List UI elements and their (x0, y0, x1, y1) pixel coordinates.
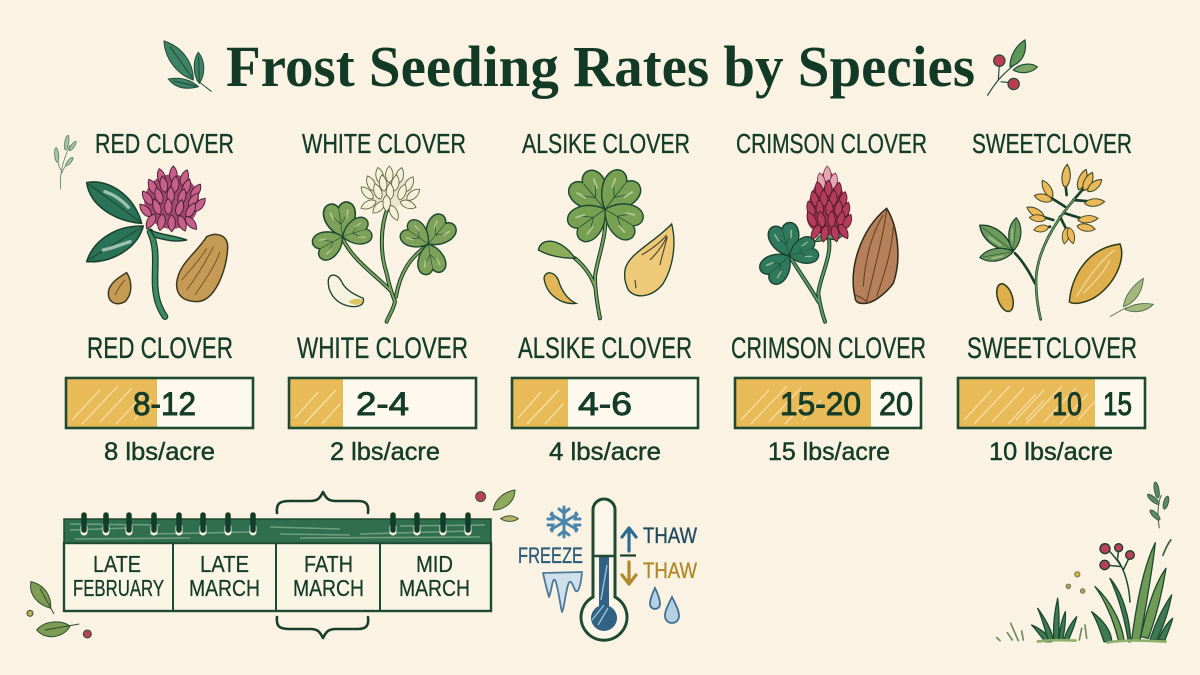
label: freeze: FREEZE (518, 543, 583, 568)
icon: icicles (543, 572, 582, 612)
label: late march (189, 551, 260, 601)
calendar header band (64, 519, 491, 543)
bar: alsike clover rate: 4-6 (578, 386, 632, 422)
icon: title right sprig (987, 40, 1037, 96)
label: crimson clover: CRIMSON CLOVER (731, 332, 926, 365)
calendar rings (84, 515, 468, 532)
calendar: seeding window (64, 492, 491, 638)
bar: white clover rate (289, 378, 476, 428)
icon: calendar upper-right leaves (476, 490, 518, 521)
label: red clover: RED CLOVER (87, 332, 233, 365)
bar: crimson clover rate: 15-20 (780, 386, 861, 422)
icon: corner grass and berries (997, 482, 1173, 643)
icon: water drops (650, 588, 679, 623)
heading: sweetclover: SWEETCLOVER (972, 128, 1132, 159)
bar: white clover rate: 2-4 (356, 386, 409, 422)
heading: crimson clover: CRIMSON CLOVER (736, 128, 927, 159)
panel: red clover (66, 128, 253, 466)
rate: alsike clover: 4 lbs/acre (549, 438, 661, 466)
brace above (277, 492, 368, 513)
label: mid march: MID (416, 551, 453, 577)
label: alsike clover: ALSIKE CLOVER (518, 332, 692, 365)
rate: white clover: 2 lbs/acre (330, 438, 440, 466)
bar: red clover rate: 8-12 (133, 386, 196, 422)
bar: sweetclover rate (958, 378, 1145, 428)
label: late february (73, 551, 164, 601)
bar: crimson clover rate (735, 378, 921, 428)
icon: arrow up (622, 528, 636, 551)
icon: white clover plant and seed (310, 166, 460, 322)
bar: alsike clover rate (512, 378, 698, 428)
icon: calendar lower-left leaves (27, 582, 91, 638)
heading: alsike clover: ALSIKE CLOVER (522, 128, 690, 159)
icon: arrow down (622, 562, 636, 584)
rate: red clover: 8 lbs/acre (104, 438, 215, 466)
bar: crimson clover rate: 20 (879, 386, 913, 422)
icon: thermometer (581, 499, 627, 640)
icon: crimson clover plant and seed (756, 166, 898, 322)
bar: sweetclover rate: 10 (1052, 386, 1082, 422)
label: late february: FEBRUARY (73, 575, 164, 601)
panel: white clover (289, 128, 476, 466)
heading: white clover: WHITE CLOVER (302, 128, 466, 159)
bar: sweetclover rate: 15 (1103, 386, 1132, 422)
icon: small sprig near red clover (54, 135, 77, 189)
calendar grid (64, 543, 491, 611)
label: late march: LATE (200, 551, 249, 577)
panel: freeze and thaw thermometer (518, 499, 697, 640)
label: mid march: MARCH (399, 575, 470, 601)
icon: title left sprig (164, 41, 212, 92)
heading: red clover: RED CLOVER (95, 128, 234, 159)
label: fath march: FATH (304, 551, 353, 577)
icon: snowflake (548, 507, 580, 537)
bar: red clover rate (66, 378, 253, 428)
icon: alsike clover plant and seeds (538, 166, 674, 318)
icon: red clover plant and seeds (87, 166, 228, 317)
label: white clover: WHITE CLOVER (297, 332, 468, 365)
title: Frost Seeding Rates by Species (226, 34, 975, 99)
label: sweetclover: SWEETCLOVER (967, 332, 1137, 365)
label: mid march (399, 551, 470, 601)
panel: alsike clover (512, 128, 698, 466)
panel: crimson clover (731, 128, 927, 466)
rate: crimson clover: 15 lbs/acre (768, 438, 890, 466)
label: fath march: MARCH (293, 575, 364, 601)
label: thaw down: THAW (643, 558, 697, 583)
divider dash (620, 554, 636, 557)
rate: sweetclover: 10 lbs/acre (989, 438, 1113, 466)
label: thaw up: THAW (643, 523, 697, 548)
panel: sweetclover (958, 128, 1153, 466)
label: late march: MARCH (189, 575, 260, 601)
brace below (277, 617, 368, 638)
label: late february: LATE (93, 551, 141, 577)
label: fath march (293, 551, 364, 601)
icon: sweetclover plant and seeds (975, 164, 1153, 319)
